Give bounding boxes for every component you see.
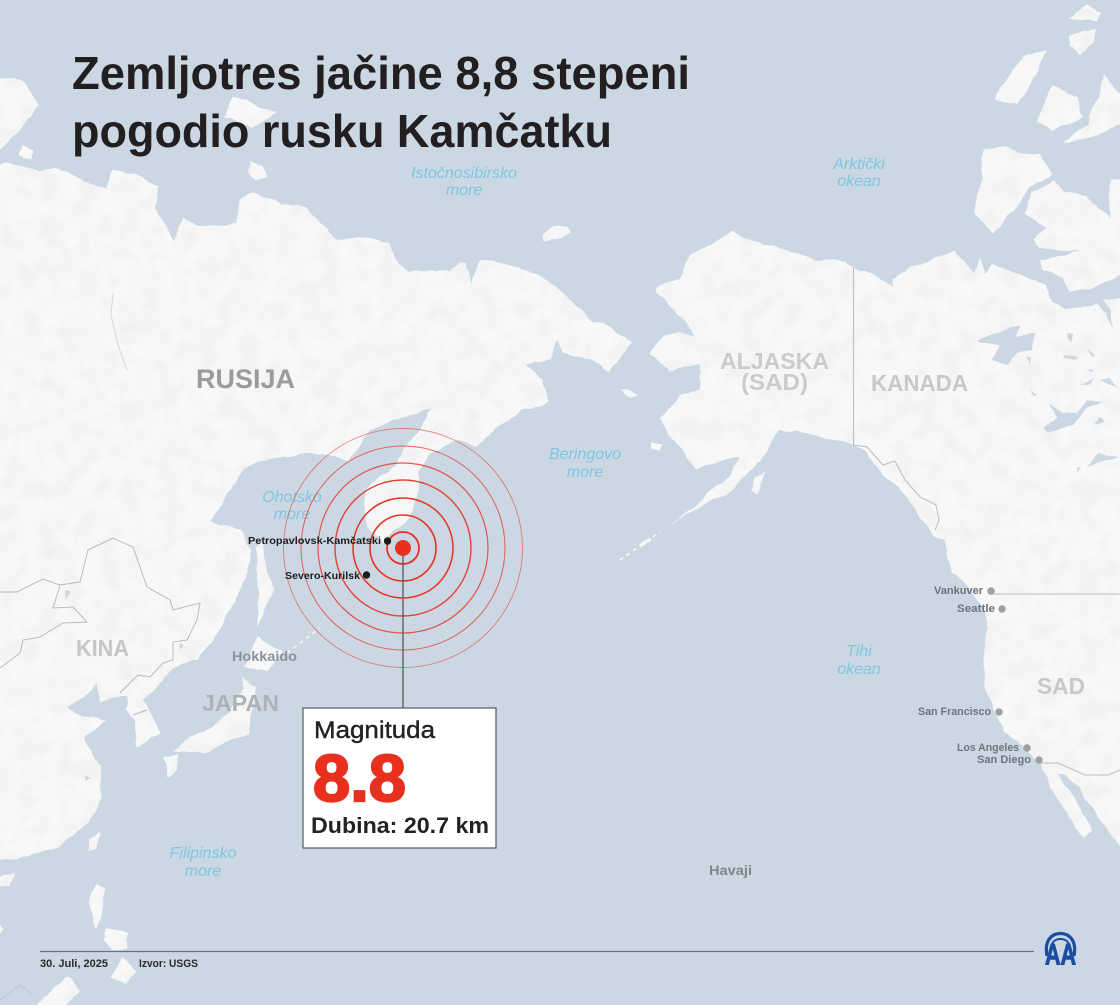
icon: AA logo: AA xyxy=(1045,938,1076,972)
label: Philippine Sea: more xyxy=(185,863,221,880)
epicentre dot xyxy=(395,540,411,556)
rivers xyxy=(111,293,127,370)
city: San Diego: San Diego xyxy=(977,754,1031,766)
label: Arctic Ocean: okean xyxy=(837,173,881,190)
land: Bering sea islands xyxy=(620,388,767,548)
country borders xyxy=(0,268,1120,1000)
label: Bering Sea: more xyxy=(567,464,603,481)
label: East Siberian Sea: more xyxy=(446,182,482,199)
title: pogodio rusku Kamčatku xyxy=(72,105,612,157)
sea labels xyxy=(170,156,885,880)
land: Japan xyxy=(163,637,283,777)
label: Alaska xyxy=(720,348,829,395)
magnitude value: 8.8 xyxy=(313,741,406,815)
callout: magnitude box xyxy=(303,708,496,848)
lakes xyxy=(65,325,1120,782)
land: Eurasia with Kamchatka xyxy=(0,163,631,860)
label: Hawaii: Havaji xyxy=(709,863,752,878)
label: Pacific Ocean: okean xyxy=(837,661,881,678)
city: Severo-Kurilsk: Severo-Kurilsk xyxy=(285,570,360,582)
country labels xyxy=(76,348,1085,878)
title xyxy=(72,47,690,157)
lake: Great Bear xyxy=(977,325,1035,365)
land: Wrangel island xyxy=(542,226,571,242)
land: Arctic archipelago xyxy=(973,4,1120,292)
city: Vancouver: Vankuver xyxy=(934,585,984,597)
footer rule xyxy=(40,950,1034,952)
label: Alaska: ALJASKA xyxy=(720,348,829,374)
lake: small waters xyxy=(65,333,1117,782)
land: north-west island xyxy=(0,78,39,155)
seismic rings xyxy=(284,428,522,668)
leader line xyxy=(402,556,404,708)
label: Bering Sea: Beringovo xyxy=(549,446,621,463)
lake: Great Slave xyxy=(1043,400,1102,433)
label: Sea of Okhotsk: Ohotsko xyxy=(262,489,322,506)
footer source: Izvor: USGS xyxy=(139,958,198,970)
land: Sakhalin xyxy=(257,540,273,627)
label: Philippine Sea: Filipinsko xyxy=(170,845,236,862)
label: Russia: RUSIJA xyxy=(196,364,295,394)
depth: Dubina: 20.7 km xyxy=(311,813,489,838)
icon: AA logo xyxy=(1045,934,1076,972)
land: New Siberian islands xyxy=(20,95,275,180)
land: North America xyxy=(650,232,1120,860)
lake: Athabasca xyxy=(1087,453,1120,467)
label: USA: SAD xyxy=(1037,673,1085,699)
city markers xyxy=(918,585,1043,766)
title: Zemljotres jačine 8,8 stepeni xyxy=(72,47,690,99)
label: Arctic Ocean: Arktički xyxy=(832,156,885,173)
city: San Francisco: San Francisco xyxy=(918,706,991,718)
label: Japan: JAPAN xyxy=(202,690,279,716)
land: Taiwan, Hainan xyxy=(0,830,100,887)
label: China: KINA xyxy=(76,635,129,661)
city: Los Angeles: Los Angeles xyxy=(957,742,1019,754)
label: Sea of Okhotsk: more xyxy=(274,506,310,523)
label: Hokkaido: Hokkaido xyxy=(232,649,297,664)
footer date: 30. Juli, 2025 xyxy=(40,958,108,970)
callout heading: Magnituda xyxy=(314,717,436,744)
land: Philippines xyxy=(87,884,137,983)
label: East Siberian Sea: Istočnosibirsko xyxy=(411,165,517,182)
label: Pacific Ocean: Tihi xyxy=(846,643,872,660)
island chains xyxy=(287,532,660,653)
label: Alaska: (SAD) xyxy=(741,369,808,395)
city: Seattle: Seattle xyxy=(957,603,995,615)
city: Petropavlovsk-Kamchatski: Petropavlovsk-Kamčatski xyxy=(248,535,381,547)
label: Canada: KANADA xyxy=(871,370,968,396)
land: Borneo and Indochina xyxy=(0,915,80,1005)
